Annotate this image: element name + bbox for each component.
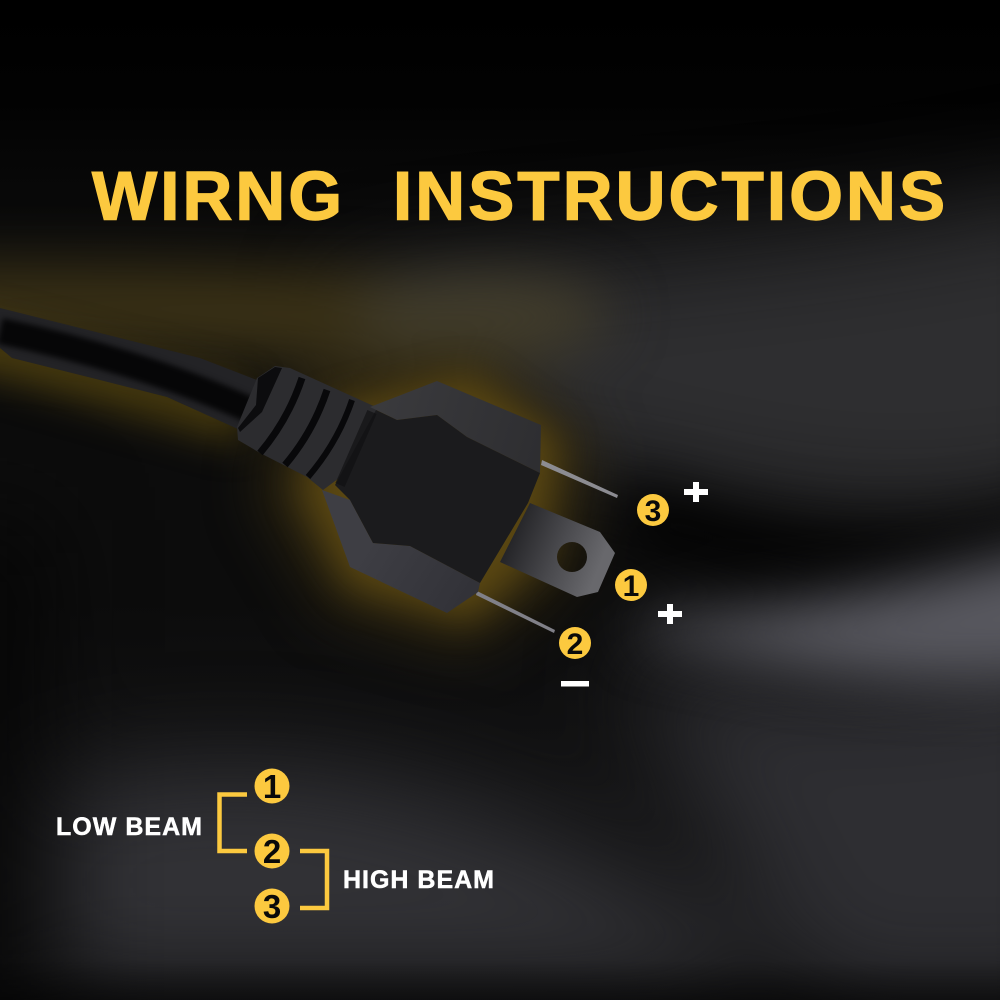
legend badge 2: 2: [263, 833, 281, 870]
legend badge 2: [254, 833, 290, 870]
high beam label: HIGH BEAM: [343, 866, 494, 894]
title: WIRNG: [92, 158, 342, 234]
plug dark centre: [335, 410, 540, 583]
plug with cable: [0, 308, 618, 633]
title: [92, 158, 945, 234]
plus sign at pin 3: [684, 482, 708, 502]
callout badge 3: 3: [645, 495, 661, 528]
minus sign at pin 2: [561, 681, 589, 686]
legend badge 1: 1: [263, 768, 281, 805]
plus sign at terminal 1: [658, 604, 682, 624]
high beam bracket: [300, 851, 327, 908]
legend badge 1: [254, 768, 290, 805]
pin 3: [541, 460, 618, 498]
callout badge 2: 2: [567, 628, 583, 661]
callout badge 2: [559, 627, 591, 661]
strain relief: [237, 366, 378, 490]
legend badge 3: 3: [263, 888, 281, 925]
plug top face: [370, 381, 541, 473]
title: INSTRUCTIONS: [393, 158, 945, 234]
blade terminal 1: [500, 503, 615, 597]
callout badge 1: 1: [623, 570, 639, 603]
callout badge 3: [637, 494, 669, 528]
legend: [56, 768, 494, 925]
low beam label: LOW BEAM: [56, 813, 202, 841]
low beam bracket: [220, 794, 247, 851]
pin 2: [476, 591, 555, 633]
cable: [0, 308, 262, 430]
plug lower face: [322, 490, 480, 613]
callout badge 1: [615, 569, 647, 603]
legend badge 3: [254, 888, 290, 925]
